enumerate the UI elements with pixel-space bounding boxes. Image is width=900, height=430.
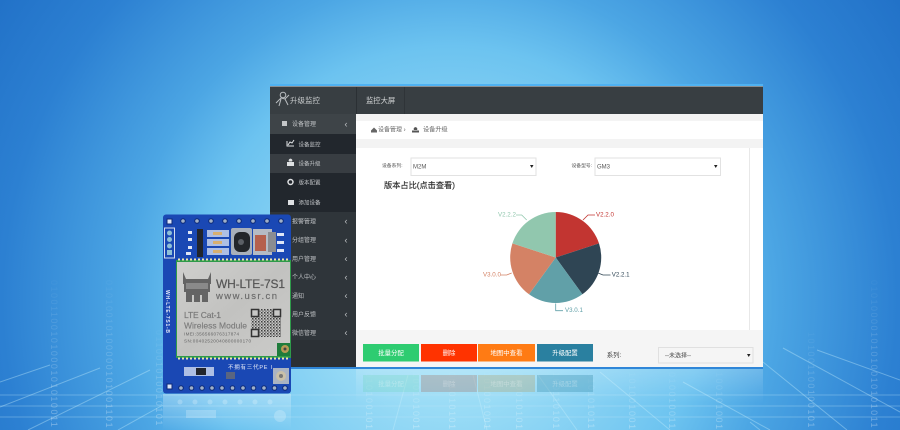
tab label: 监控大屏 [366, 96, 395, 105]
background binary digits: 010100101 [364, 372, 374, 430]
background binary digits: 100110101 [551, 372, 561, 430]
form filters: 设备型号: [572, 162, 592, 169]
chart title: 版本占比(点击查看) [384, 180, 455, 190]
background binary digits: 01010000101010010101011 [869, 280, 879, 429]
pie chart: V3.0.0 [483, 272, 501, 278]
reflection of panel: 升级配置 [552, 379, 578, 388]
sidebar: 添加设备 [298, 198, 321, 206]
module board [163, 214, 291, 430]
background binary digits: 101001100100101 [806, 332, 816, 429]
lower silkscreen [184, 363, 289, 384]
sidebar: ‹ [344, 235, 348, 245]
sidebar: ‹ [344, 328, 348, 338]
background binary digits: 010101011 [586, 372, 596, 430]
sidebar: ‹ [344, 254, 348, 264]
sidebar: ‹ [344, 216, 348, 226]
top components [164, 228, 284, 258]
sidebar: 报警管理 [292, 218, 316, 226]
form filters: M2M [413, 164, 426, 170]
sidebar: 通知 [292, 292, 304, 300]
dashboard panel [270, 84, 763, 369]
background binary digits: 011001010010101 [154, 330, 164, 427]
sidebar: 用户管理 [292, 255, 316, 263]
background binary digits: 100101001 [411, 372, 421, 430]
form filters: GM3 [597, 164, 611, 170]
sidebar: 设备升级 [298, 160, 321, 168]
qr code [251, 309, 281, 337]
action buttons [363, 344, 593, 362]
sidebar: 分组管理 [292, 236, 316, 244]
pin holes [167, 219, 287, 390]
reflection of panel: 批量分配 [378, 379, 404, 388]
sidebar: 个人中心 [292, 273, 316, 281]
action buttons: 删除 [443, 348, 456, 357]
sidebar [270, 114, 356, 367]
background binary digits: 101001001 [627, 372, 637, 430]
series select: 系列: [607, 350, 621, 359]
lower silkscreen: 不拥有三代PE I [228, 363, 272, 371]
module name: WH-LTE-7S1 [216, 277, 285, 291]
breadcrumb: 设备升级 [423, 126, 448, 134]
pie chart [483, 212, 630, 314]
website: www.usr.cn [215, 291, 277, 302]
form filters: 设备系列: [382, 162, 403, 169]
lte module: SN:00402520040800000170 [184, 338, 251, 344]
reflection of panel: 删除 [443, 379, 456, 388]
background binary digits: 001010101 [447, 372, 457, 430]
sidebar: 设备监控 [298, 140, 321, 148]
module description: LTE Cat-1 [184, 310, 221, 320]
background binary digits [49, 280, 879, 430]
action buttons: 地图中查看 [491, 348, 523, 357]
pcb [163, 214, 291, 394]
logo title: 升级监控 [290, 95, 320, 105]
background binary digits: 100101001 [714, 372, 724, 430]
pie chart: V3.0.1 [565, 307, 583, 314]
top bar [270, 86, 763, 114]
sidebar: ‹ [344, 309, 348, 319]
action buttons: 批量分配 [378, 348, 404, 357]
lte module [176, 260, 291, 358]
sidebar: ‹ [344, 272, 348, 282]
background binary digits: 101001001 [482, 372, 492, 430]
sidebar: ‹ [344, 119, 348, 129]
reflection of board [163, 394, 291, 430]
reflection of panel [356, 369, 763, 403]
vertical board label: WH-LTE-7S1-B [164, 290, 170, 333]
sidebar: 版本配置 [298, 178, 321, 186]
sidebar: 微信管理 [292, 329, 316, 337]
breadcrumb: 设备管理 › [378, 126, 406, 134]
background binary digits: 010010011 [667, 372, 677, 430]
series select [607, 348, 753, 363]
pie chart: V2.2.0 [596, 212, 614, 219]
icon: logo figure [276, 92, 289, 106]
pie chart: V2.2.1 [612, 272, 630, 279]
sidebar: 设备管理 [292, 120, 316, 128]
lte module: Wireless Module [184, 320, 247, 330]
icon: usr logo [183, 272, 211, 302]
reflection of panel: 地图中查看 [491, 379, 523, 388]
background binary digits: 01001100101000101010011 [49, 280, 59, 428]
background perspective grid [0, 348, 900, 430]
serial numbers: IMEI:356566076317874 [184, 332, 239, 337]
form filters [382, 148, 750, 330]
action buttons: 升级配置 [552, 348, 578, 357]
background binary digits: 010010101 [514, 372, 524, 430]
breadcrumb [356, 114, 763, 330]
series select: --未选择-- [665, 352, 691, 360]
header pins [164, 228, 174, 258]
pie chart: V2.2.2 [498, 212, 516, 219]
sidebar: ‹ [344, 290, 348, 300]
sidebar: 用户反馈 [292, 310, 316, 318]
background binary digits: 01010010100000101001101 [104, 280, 114, 429]
